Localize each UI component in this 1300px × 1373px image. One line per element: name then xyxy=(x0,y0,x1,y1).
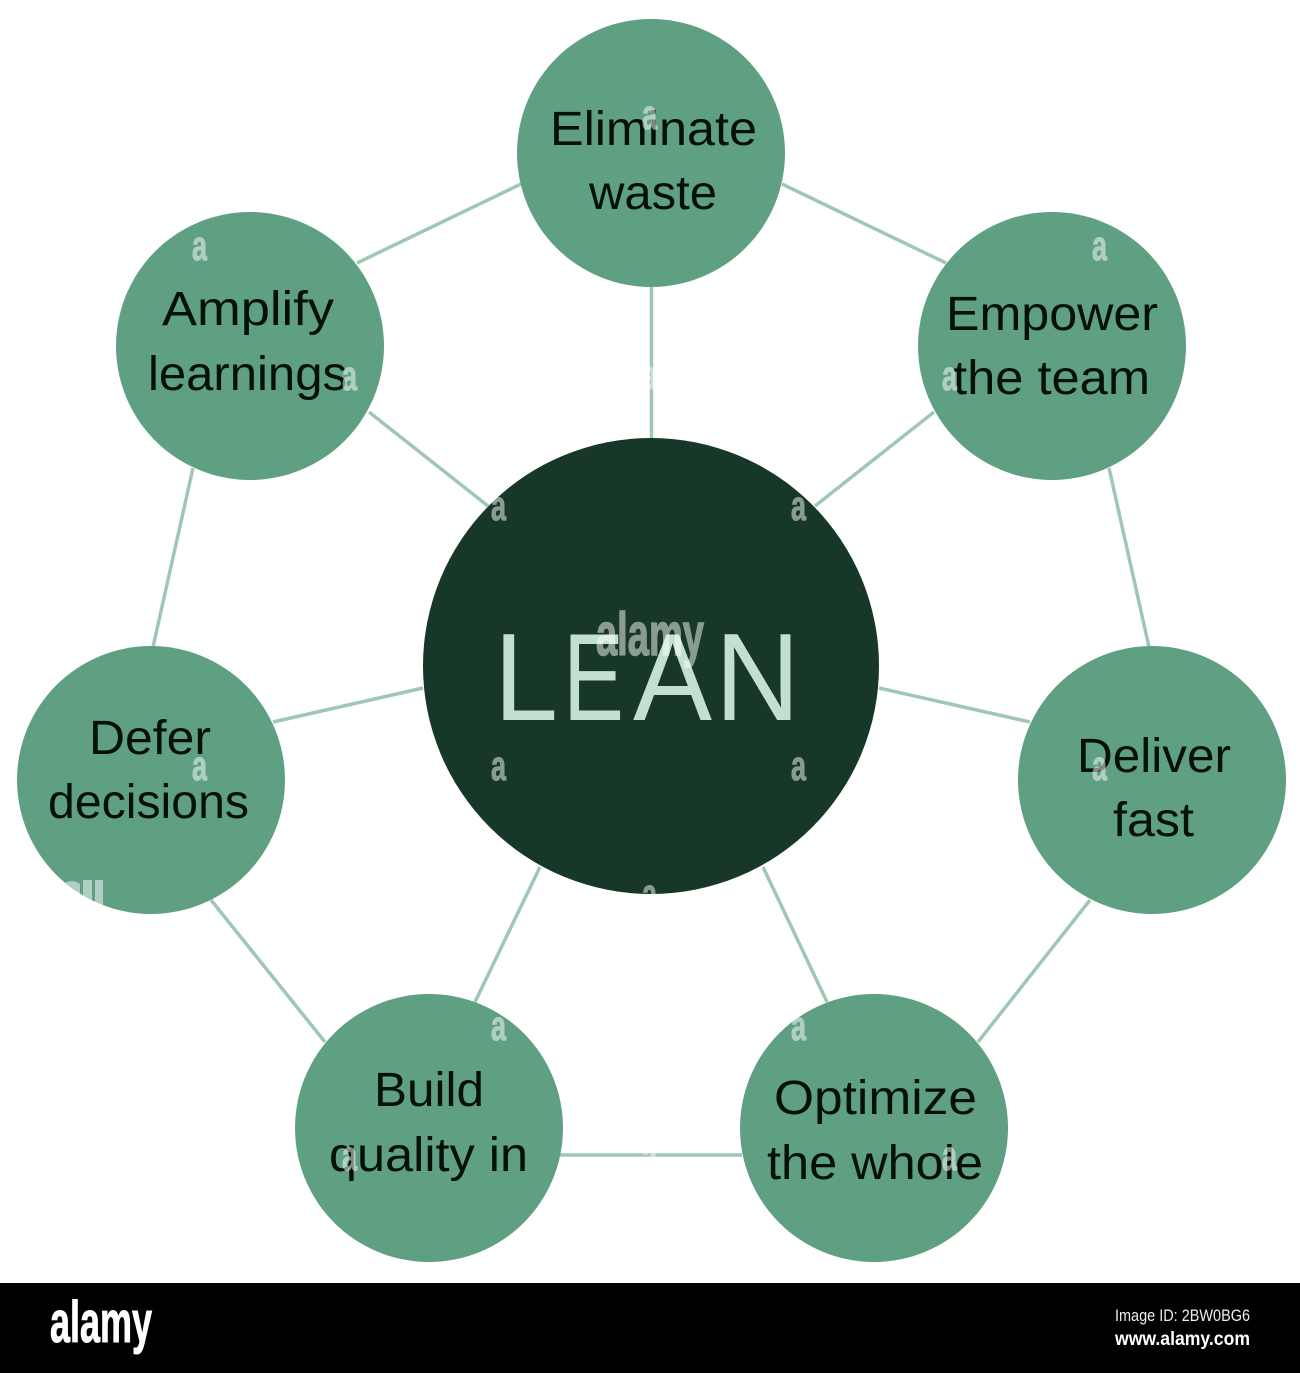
watermark: a xyxy=(642,352,657,399)
node: Empower the team: Empower xyxy=(946,288,1158,341)
watermark: a xyxy=(1092,222,1107,269)
node: Amplify learnings: learnings xyxy=(148,348,347,401)
watermark xyxy=(63,91,1107,1179)
watermark: a xyxy=(1092,742,1107,789)
watermark: a xyxy=(491,1002,506,1049)
watermark: a xyxy=(342,1132,357,1179)
node: Defer decisions: Defer xyxy=(89,712,211,765)
footer bar: www.alamy.com xyxy=(1114,1329,1250,1350)
node: Eliminate waste: Eliminate xyxy=(550,103,757,156)
footer bar: Image ID: 2BW0BG6 xyxy=(1115,1306,1250,1325)
node: Empower the team: the team xyxy=(953,352,1150,405)
node: Eliminate waste xyxy=(517,19,785,287)
center node: LEAN: N xyxy=(715,609,800,747)
node: Deliver fast: Deliver xyxy=(1077,730,1231,783)
watermark: a xyxy=(791,482,806,529)
watermark: a xyxy=(192,742,207,789)
node: Defer decisions: decisions xyxy=(48,776,249,829)
node: Optimize the whole: the whole xyxy=(767,1137,983,1190)
footer bar xyxy=(0,1283,1300,1373)
watermark: a xyxy=(642,91,657,138)
node: Deliver fast: fast xyxy=(1113,794,1194,847)
node: Defer decisions xyxy=(17,646,285,914)
watermark: a xyxy=(791,1002,806,1049)
center node: LEAN: E xyxy=(563,609,624,747)
node: Build quality in: quality in xyxy=(329,1129,528,1182)
watermark: a xyxy=(642,1132,657,1179)
node: Empower the team xyxy=(918,212,1186,480)
node: Build quality in: Build xyxy=(374,1064,484,1117)
watermark: a xyxy=(491,742,506,789)
node: Amplify learnings: Amplify xyxy=(162,283,334,336)
watermark: alamy xyxy=(596,601,704,668)
watermark: a xyxy=(192,222,207,269)
node: Optimize the whole xyxy=(740,994,1008,1262)
center node: LEAN: L xyxy=(494,609,558,747)
watermark: a xyxy=(342,352,357,399)
watermark: a xyxy=(491,482,506,529)
center node: LEAN: A xyxy=(633,609,712,747)
node: Build quality in xyxy=(295,994,563,1262)
node: Amplify learnings xyxy=(116,212,384,480)
footer bar: alamy xyxy=(50,1290,152,1355)
node: Deliver fast xyxy=(1018,646,1286,914)
watermark: a xyxy=(942,1132,957,1179)
node: Optimize the whole: Optimize xyxy=(774,1072,977,1125)
watermark: a xyxy=(942,352,957,399)
watermark: a xyxy=(642,870,657,917)
center node: LEAN xyxy=(423,438,879,894)
watermark: a xyxy=(791,742,806,789)
node: Eliminate waste: waste xyxy=(588,167,717,220)
